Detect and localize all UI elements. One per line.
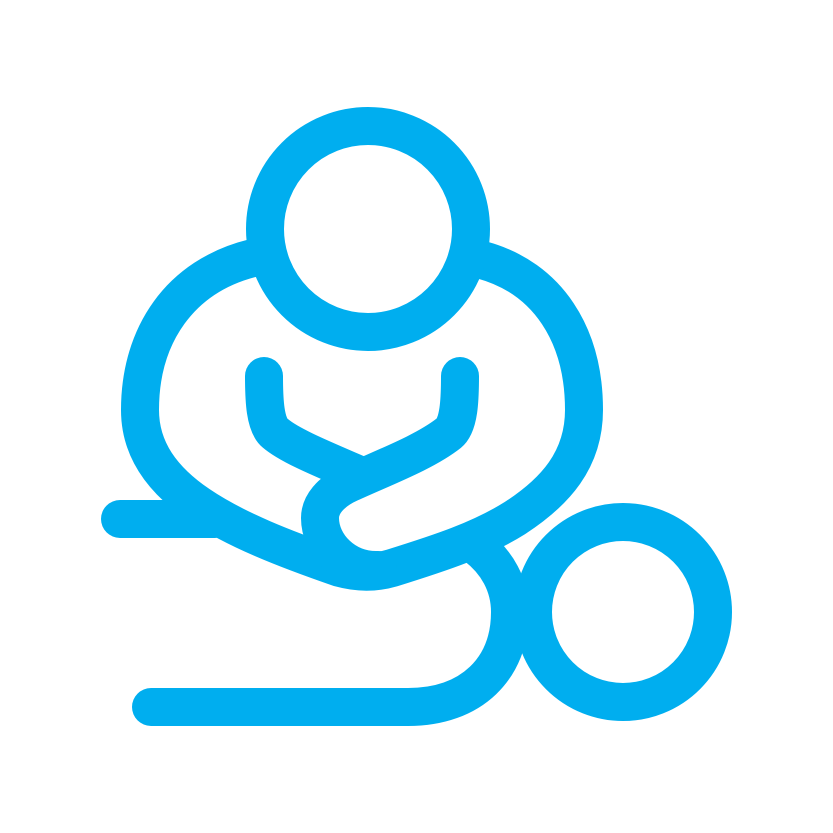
icon: rescuer head <box>265 126 471 332</box>
icon: rescuer left forearm <box>264 376 362 476</box>
icon: rescuer left hand cap <box>245 357 283 395</box>
icon: patient arm and body <box>151 546 510 707</box>
icon: rescuer right forearm loop <box>320 376 460 570</box>
icon: rescuer left arm and shoulder <box>140 258 584 572</box>
icon: ground line behind rescuer <box>120 500 215 538</box>
icon: patient head <box>533 522 713 702</box>
